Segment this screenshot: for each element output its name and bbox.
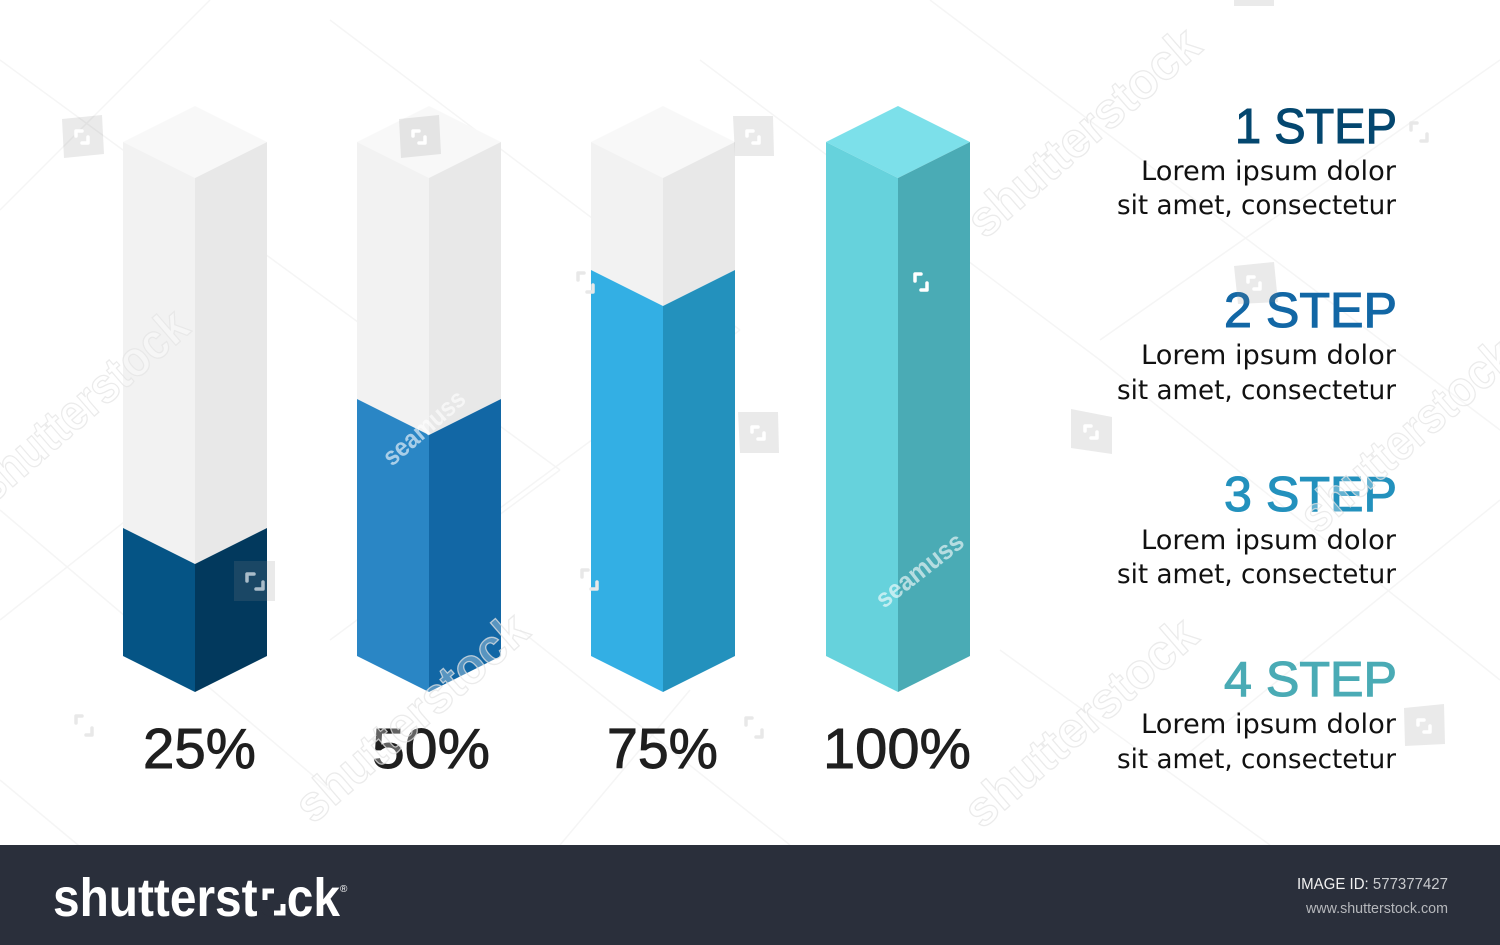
step 1 (1117, 100, 1397, 221)
footer bar (0, 845, 1500, 945)
bar 100% (826, 106, 970, 692)
step 4: 4 STEP (1224, 653, 1397, 707)
step 2 (1117, 284, 1397, 406)
label: 25%: 25% (143, 717, 256, 781)
step 2: Lorem ipsum dolor (1141, 340, 1397, 371)
label: 50%: 50% (372, 717, 490, 781)
watermark text: shutterstock (952, 606, 1208, 838)
bar 75% (591, 106, 735, 692)
watermark text: seamuss (869, 526, 970, 614)
step 4: Lorem ipsum dolor (1141, 709, 1397, 740)
watermark bracket icons (76, 123, 1430, 737)
footer image id (1297, 876, 1448, 917)
step 4 (1117, 653, 1397, 775)
watermark text: shutterstock (955, 16, 1211, 248)
step 2: sit amet, consectetur (1117, 375, 1397, 406)
watermark badges (62, 0, 1445, 746)
footer image id: www.shutterstock.com (1305, 900, 1448, 917)
watermark text: shutterstock (283, 601, 539, 833)
step 1: Lorem ipsum dolor (1141, 156, 1397, 187)
step 3: 3 STEP (1224, 468, 1397, 522)
step 2: 2 STEP (1224, 284, 1397, 338)
footer logo: ® (340, 884, 348, 895)
step 1: sit amet, consectetur (1117, 190, 1397, 221)
step 1: 1 STEP (1235, 100, 1397, 154)
footer image id: IMAGE ID: 577377427 (1297, 876, 1448, 893)
step 4: sit amet, consectetur (1117, 744, 1397, 775)
step 3 (1117, 468, 1397, 590)
footer logo: shutterstock (53, 868, 341, 928)
watermark text: seamuss (376, 383, 471, 472)
label: 75%: 75% (607, 717, 718, 781)
step 3: sit amet, consectetur (1117, 559, 1397, 590)
bar 25% (123, 106, 267, 692)
label: 100%: 100% (823, 717, 971, 781)
step 3: Lorem ipsum dolor (1141, 525, 1397, 556)
bar 50% (357, 106, 501, 692)
